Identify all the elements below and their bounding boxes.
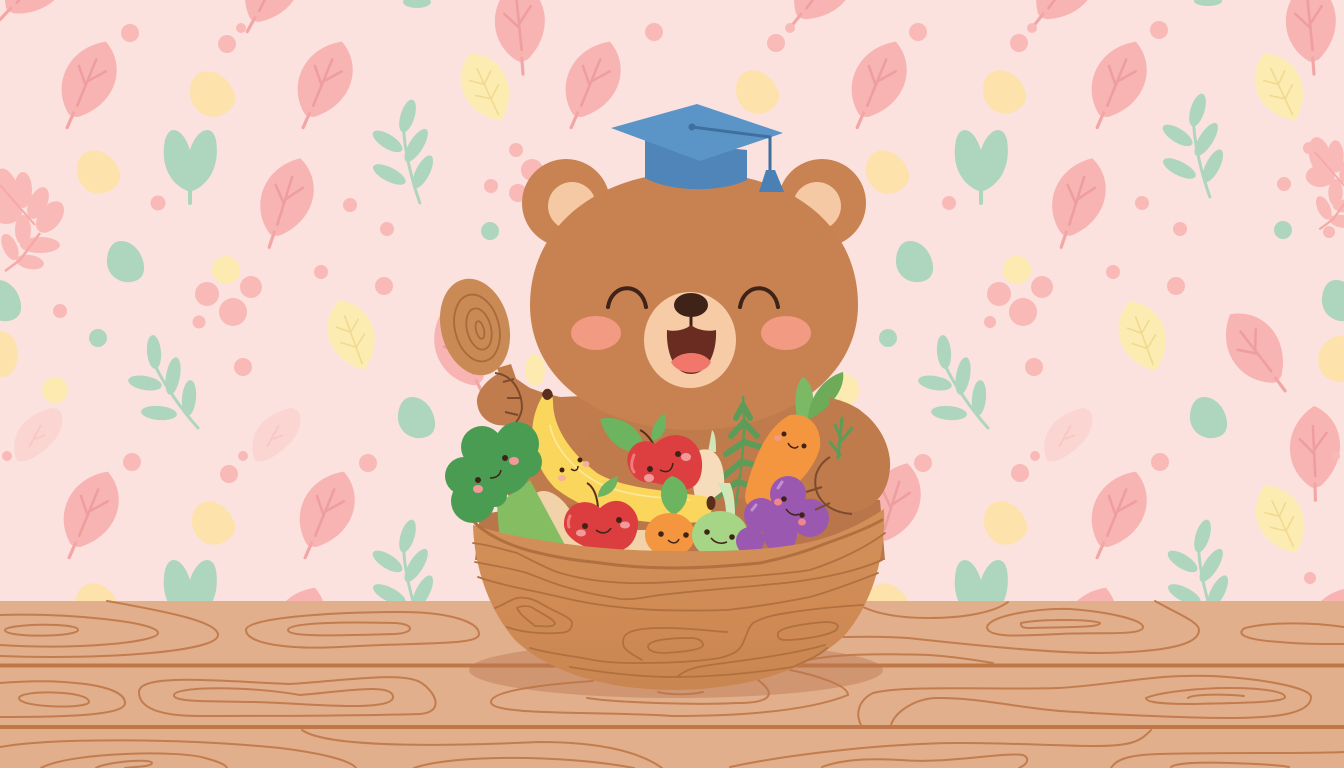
bear left arm and paw — [477, 373, 610, 450]
wallpaper pattern: pink dots — [2, 21, 1340, 584]
front grapes — [736, 518, 797, 555]
bear ears — [522, 159, 866, 247]
bowl body — [473, 509, 884, 690]
bear closed happy eyes — [608, 288, 778, 307]
bowl shadow on table — [469, 642, 883, 698]
grapes bunch — [717, 476, 829, 554]
turnip — [692, 511, 748, 559]
small carrot — [645, 476, 695, 557]
carrot, large, smiling — [745, 372, 843, 505]
bear muzzle and open mouth — [644, 292, 736, 388]
table wood grain — [0, 601, 1344, 768]
bear head — [530, 172, 858, 430]
wallpaper pattern: autumn leaves — [0, 135, 1344, 271]
wallpaper background — [0, 0, 1344, 602]
banana — [532, 389, 716, 523]
bowl grain — [473, 520, 885, 677]
bowl interior — [475, 498, 885, 560]
bear — [477, 104, 874, 520]
ginger root — [692, 430, 724, 510]
bottom apple — [564, 476, 638, 552]
wooden spoon — [430, 271, 536, 442]
broccoli — [445, 422, 565, 545]
rosemary sprig — [718, 397, 764, 507]
table plank seams — [0, 666, 1344, 727]
bear cheeks — [571, 316, 811, 350]
wooden bowl — [473, 509, 885, 690]
wallpaper pattern: yellow leaves — [0, 44, 1344, 634]
graduation cap — [611, 104, 784, 192]
right arm and paw — [806, 398, 890, 514]
top apple with leaf — [600, 413, 702, 490]
bear body — [501, 394, 874, 520]
wooden table — [0, 601, 1344, 768]
ginger root pieces — [531, 491, 660, 555]
